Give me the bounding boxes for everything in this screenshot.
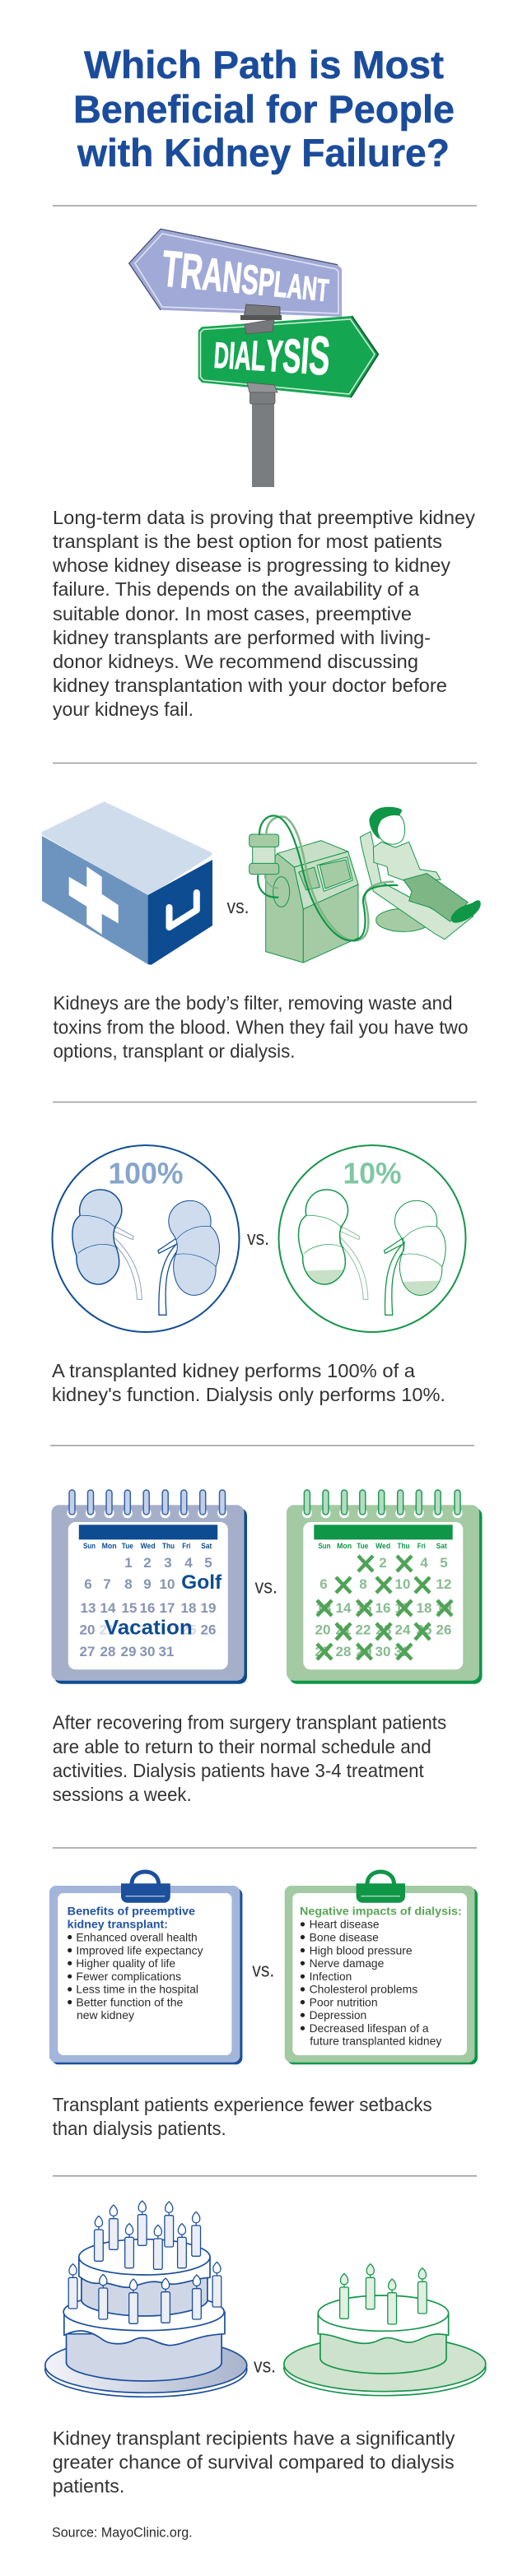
icon: crossroads signpost xyxy=(129,229,378,487)
sign: dialysis: DIALYSIS xyxy=(212,319,332,387)
panel: calendar comparison xyxy=(51,1490,483,1805)
label: vs: vs. xyxy=(252,1960,274,1982)
dates: 15 xyxy=(357,1600,371,1616)
label: vs: vs. xyxy=(254,2355,276,2377)
text: introduction: kidney transplants are performed with living- xyxy=(53,627,431,648)
dates: 26 xyxy=(201,1622,216,1637)
dates: 29 xyxy=(121,1644,136,1659)
dates: 16 xyxy=(375,1600,390,1616)
text: introduction: your kidneys fail. xyxy=(53,699,194,720)
weekday labels: Tue xyxy=(357,1542,368,1551)
dates: 28 xyxy=(100,1644,115,1659)
sign: transplant xyxy=(129,229,342,317)
negative impacts list: Poor nutrition xyxy=(310,1995,378,2008)
dates: 7 xyxy=(103,1576,111,1592)
panel: kidney function comparison xyxy=(52,1145,466,1405)
text: kidneys are the filter: toxins from the blood. When they fail you have two xyxy=(53,1017,468,1038)
clipboard heading: Benefits of preemptive xyxy=(68,1905,195,1918)
benefits list xyxy=(68,1930,203,2021)
icon: organ transplant box xyxy=(42,804,212,965)
text: introduction xyxy=(52,507,475,720)
dates: 6 xyxy=(84,1576,92,1592)
dates: 31 xyxy=(159,1644,174,1659)
clipboard: negative impacts of dialysis xyxy=(285,1872,478,2064)
dates: 5 xyxy=(204,1555,212,1571)
dates: 26 xyxy=(436,1622,451,1637)
dates: 15 xyxy=(122,1600,137,1616)
negative impacts list: High blood pressure xyxy=(310,1943,413,1956)
text: fewer setbacks: Transplant patients experience fewer setbacks xyxy=(53,2094,432,2115)
text: introduction: donor kidneys. We recommend discussing xyxy=(53,651,418,672)
text: introduction: whose kidney disease is progressing to kidney xyxy=(52,555,450,576)
clipboard heading: kidney transplant: xyxy=(68,1918,168,1931)
text: schedule comparison: activities. Dialysis patients have 3-4 treatment xyxy=(53,1760,424,1781)
benefits list: Less time in the hospital xyxy=(76,1983,198,1996)
panel: clipboards comparison xyxy=(49,1872,478,2139)
weekday labels xyxy=(318,1542,448,1551)
dates: 18 xyxy=(181,1600,196,1616)
text: schedule comparison: are able to return to their normal schedule and xyxy=(53,1736,431,1757)
calendar rings xyxy=(67,1490,227,1518)
treatment day crosses xyxy=(317,1556,452,1659)
text: fewer setbacks: than dialysis patients. xyxy=(53,2118,226,2139)
dates: 2 xyxy=(379,1555,387,1571)
chart: dialysis kidney 10 percent xyxy=(278,1145,466,1332)
negative impacts list: Bone disease xyxy=(310,1930,379,1943)
candles xyxy=(68,2201,222,2323)
text: survival xyxy=(53,2428,455,2496)
dates: 17 xyxy=(395,1600,410,1616)
dates: 27 xyxy=(80,1644,95,1659)
text: introduction: transplant is the best option for most patients xyxy=(53,531,442,552)
benefits list: Better function of the xyxy=(76,1995,184,2008)
title: Which Path is Most xyxy=(84,43,444,86)
weekday labels xyxy=(83,1542,212,1551)
dates: 21 xyxy=(100,1622,114,1637)
dates: 20 xyxy=(315,1622,330,1637)
dates: 1 xyxy=(124,1555,133,1571)
text: introduction: failure. This depends on the availability of a xyxy=(53,578,420,600)
negative impacts list: Nerve damage xyxy=(310,1956,385,1970)
text: kidney function: kidney's function. Dialysis only performs 10%. xyxy=(52,1384,445,1405)
dates: 18 xyxy=(417,1600,431,1616)
dates: 5 xyxy=(440,1555,448,1571)
dates: 25 xyxy=(417,1622,431,1637)
source: Source: MayoClinic.org. xyxy=(52,2524,193,2540)
chart: transplanted kidney 100 percent: 100% xyxy=(109,1157,183,1190)
dates: 25 xyxy=(181,1622,196,1637)
sign: transplant: TRANSPLANT xyxy=(160,240,332,312)
dates: 14 xyxy=(336,1600,352,1616)
benefits list: new kidney xyxy=(77,2008,134,2021)
sign brackets xyxy=(240,304,282,320)
text: schedule comparison: After recovering from surgery transplant patients xyxy=(53,1711,446,1733)
text: kidneys are the filter xyxy=(53,992,468,1061)
negative impacts list: Cholesterol problems xyxy=(310,1983,417,1996)
text: kidney function xyxy=(52,1360,445,1405)
dates: 6 xyxy=(319,1576,328,1592)
dates: 20 xyxy=(80,1622,95,1637)
clipboard heading xyxy=(68,1905,195,1931)
dates: 17 xyxy=(160,1600,175,1616)
negative impacts list: Depression xyxy=(310,2008,366,2021)
dates: 21 xyxy=(336,1622,351,1637)
dates: 13 xyxy=(316,1600,331,1616)
negative impacts list: Heart disease xyxy=(310,1918,380,1931)
weekday labels: Mon xyxy=(102,1542,117,1551)
label: vs: vs. xyxy=(247,1228,269,1250)
dates: 31 xyxy=(394,1644,409,1659)
text: introduction: suitable donor. In most cases, preemptive xyxy=(53,603,412,624)
negative impacts list xyxy=(301,1918,441,2048)
candles xyxy=(340,2264,427,2324)
text: survival: patients. xyxy=(53,2475,124,2496)
icon: dialysis birthday cake xyxy=(284,2264,486,2396)
dates: 4 xyxy=(420,1555,428,1571)
text: survival: Kidney transplant recipients have a significantly xyxy=(53,2428,455,2449)
text: kidneys are the filter: Kidneys are the body’s filter, removing waste and xyxy=(53,992,453,1014)
label: vs: vs. xyxy=(255,1576,277,1598)
negative impacts list: Infection xyxy=(310,1970,352,1983)
clipboard heading: Negative impacts of dialysis: xyxy=(300,1905,462,1918)
sign clamps xyxy=(245,319,277,404)
dates: 22 xyxy=(356,1622,371,1637)
dates: 30 xyxy=(375,1644,390,1659)
calendar rings xyxy=(302,1490,463,1518)
negative impacts list: Decreased lifespan of a xyxy=(310,2021,429,2035)
benefits list: Improved life expectancy xyxy=(76,1943,203,1956)
weekday labels: Sun xyxy=(83,1542,96,1551)
dates: 10 xyxy=(160,1576,175,1592)
negative impacts list: future transplanted kidney xyxy=(310,2035,441,2048)
weekday labels: Mon xyxy=(337,1542,352,1551)
benefits list: Enhanced overall health xyxy=(76,1930,198,1943)
dates xyxy=(315,1555,451,1659)
panel: birthday cakes comparison xyxy=(45,2201,486,2540)
dates: 29 xyxy=(357,1644,371,1659)
dates: 3 xyxy=(164,1555,172,1571)
text: schedule comparison: sessions a week. xyxy=(53,1784,192,1805)
title: with Kidney Failure? xyxy=(77,131,450,174)
dates: 24 xyxy=(395,1622,411,1637)
text: introduction: Long-term data is proving that preemptive kidney xyxy=(53,507,475,528)
dates: 13 xyxy=(81,1600,96,1616)
chart: transplanted kidney 100 percent xyxy=(53,1145,239,1332)
weekday labels: Sat xyxy=(201,1542,212,1551)
text: fewer setbacks xyxy=(53,2094,432,2139)
dates: 10 xyxy=(395,1576,410,1592)
weekday labels: Tue xyxy=(122,1542,133,1551)
clipboard: benefits of preemptive transplant xyxy=(49,1872,242,2064)
text: kidneys are the filter: options, transplant or dialysis. xyxy=(53,1040,295,1061)
weekday labels: Fri xyxy=(417,1542,426,1551)
dates: 12 xyxy=(436,1576,451,1592)
weekday labels: Wed xyxy=(141,1542,156,1551)
weekday labels: Thu xyxy=(162,1542,175,1551)
text: kidney function: A transplanted kidney performs 100% of a xyxy=(52,1360,416,1381)
dates: 27 xyxy=(315,1644,330,1659)
text: schedule comparison xyxy=(53,1711,446,1805)
dates: 19 xyxy=(436,1600,451,1616)
chart: dialysis kidney 10 percent: 10% xyxy=(343,1157,402,1190)
note: golf: Golf xyxy=(181,1571,222,1594)
calendar: dialysis schedule xyxy=(287,1490,483,1684)
calendar: transplant schedule xyxy=(51,1490,247,1684)
label: vs: vs. xyxy=(227,896,249,918)
panel: transplant box vs dialysis machine xyxy=(42,804,481,1061)
title: Beneficial for People xyxy=(73,87,455,131)
sign: dialysis xyxy=(198,316,378,397)
text: survival: greater chance of survival compared to dialysis xyxy=(53,2452,455,2473)
weekday labels: Thu xyxy=(397,1542,410,1551)
title xyxy=(73,43,455,174)
dates: 14 xyxy=(100,1600,116,1616)
dates: 4 xyxy=(184,1555,193,1571)
dates: 8 xyxy=(124,1576,133,1592)
dates: 16 xyxy=(140,1600,155,1616)
weekday labels: Wed xyxy=(375,1542,390,1551)
icon: patient on dialysis machine xyxy=(250,807,481,963)
dates xyxy=(80,1555,216,1659)
text: introduction: kidney transplantation with your doctor before xyxy=(53,675,447,696)
dates: 28 xyxy=(336,1644,351,1659)
weekday labels: Sun xyxy=(318,1542,331,1551)
note: vacation: Vacation xyxy=(105,1616,193,1639)
dates: 8 xyxy=(359,1576,367,1592)
dates: 9 xyxy=(143,1576,152,1592)
benefits list: Fewer complications xyxy=(76,1970,181,1983)
dates: 19 xyxy=(201,1600,216,1616)
weekday labels: Fri xyxy=(182,1542,190,1551)
benefits list: Higher quality of life xyxy=(76,1956,175,1970)
dates: 30 xyxy=(140,1644,155,1659)
weekday labels: Sat xyxy=(436,1542,448,1551)
dates: 2 xyxy=(143,1555,152,1571)
icon: transplant birthday cake xyxy=(45,2201,247,2397)
dates: 23 xyxy=(376,1622,391,1637)
